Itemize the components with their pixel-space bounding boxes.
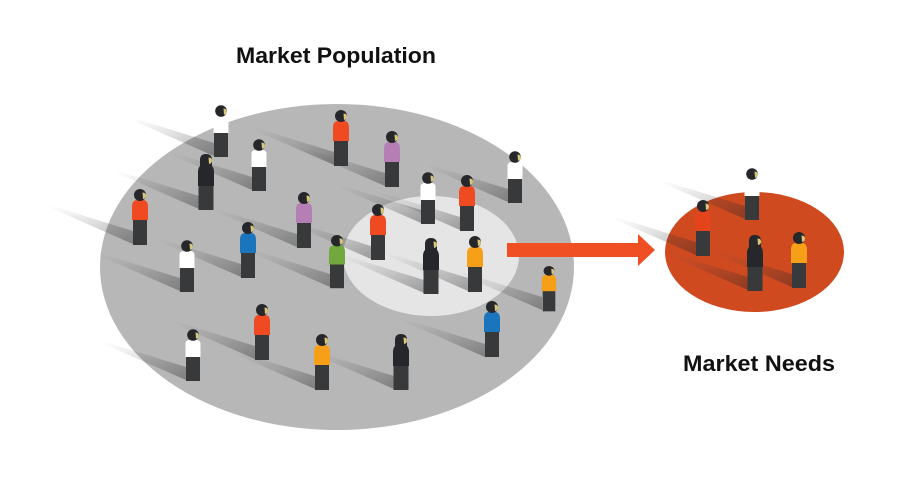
person: black 3	[393, 334, 409, 390]
person: purple 1	[384, 131, 400, 187]
person: red 4	[370, 204, 386, 260]
arrow	[507, 234, 655, 266]
needs person: red	[695, 200, 711, 256]
person: green	[329, 235, 345, 288]
ellipse: market population	[100, 104, 574, 430]
title: Market Needs: Market Needs	[683, 351, 835, 376]
person: red 2	[333, 110, 349, 166]
ellipse: market segment	[343, 196, 519, 316]
person: white 3	[420, 172, 436, 224]
person: white 1	[214, 105, 228, 157]
person: orange 3	[314, 334, 330, 390]
person: white 5	[180, 240, 194, 292]
needs person: black	[747, 235, 763, 291]
needs person: orange	[791, 232, 807, 288]
person: red 5	[254, 304, 270, 360]
person: blue 2	[484, 301, 500, 357]
person: red 3	[459, 175, 475, 231]
person: purple 2	[296, 192, 312, 248]
person: white 2	[252, 139, 266, 191]
person: black 2	[423, 238, 439, 294]
person: orange 1	[467, 236, 483, 292]
ellipse: market needs	[665, 192, 844, 312]
person: white 4	[508, 151, 522, 203]
person: black 1	[198, 154, 214, 210]
person shadows	[49, 117, 792, 389]
person: red 1	[132, 189, 148, 245]
needs person: white	[744, 168, 760, 220]
person: white 6	[186, 329, 200, 381]
person: orange 2	[542, 266, 556, 311]
title: Market Population: Market Population	[236, 43, 436, 68]
person: blue 1	[240, 222, 256, 278]
